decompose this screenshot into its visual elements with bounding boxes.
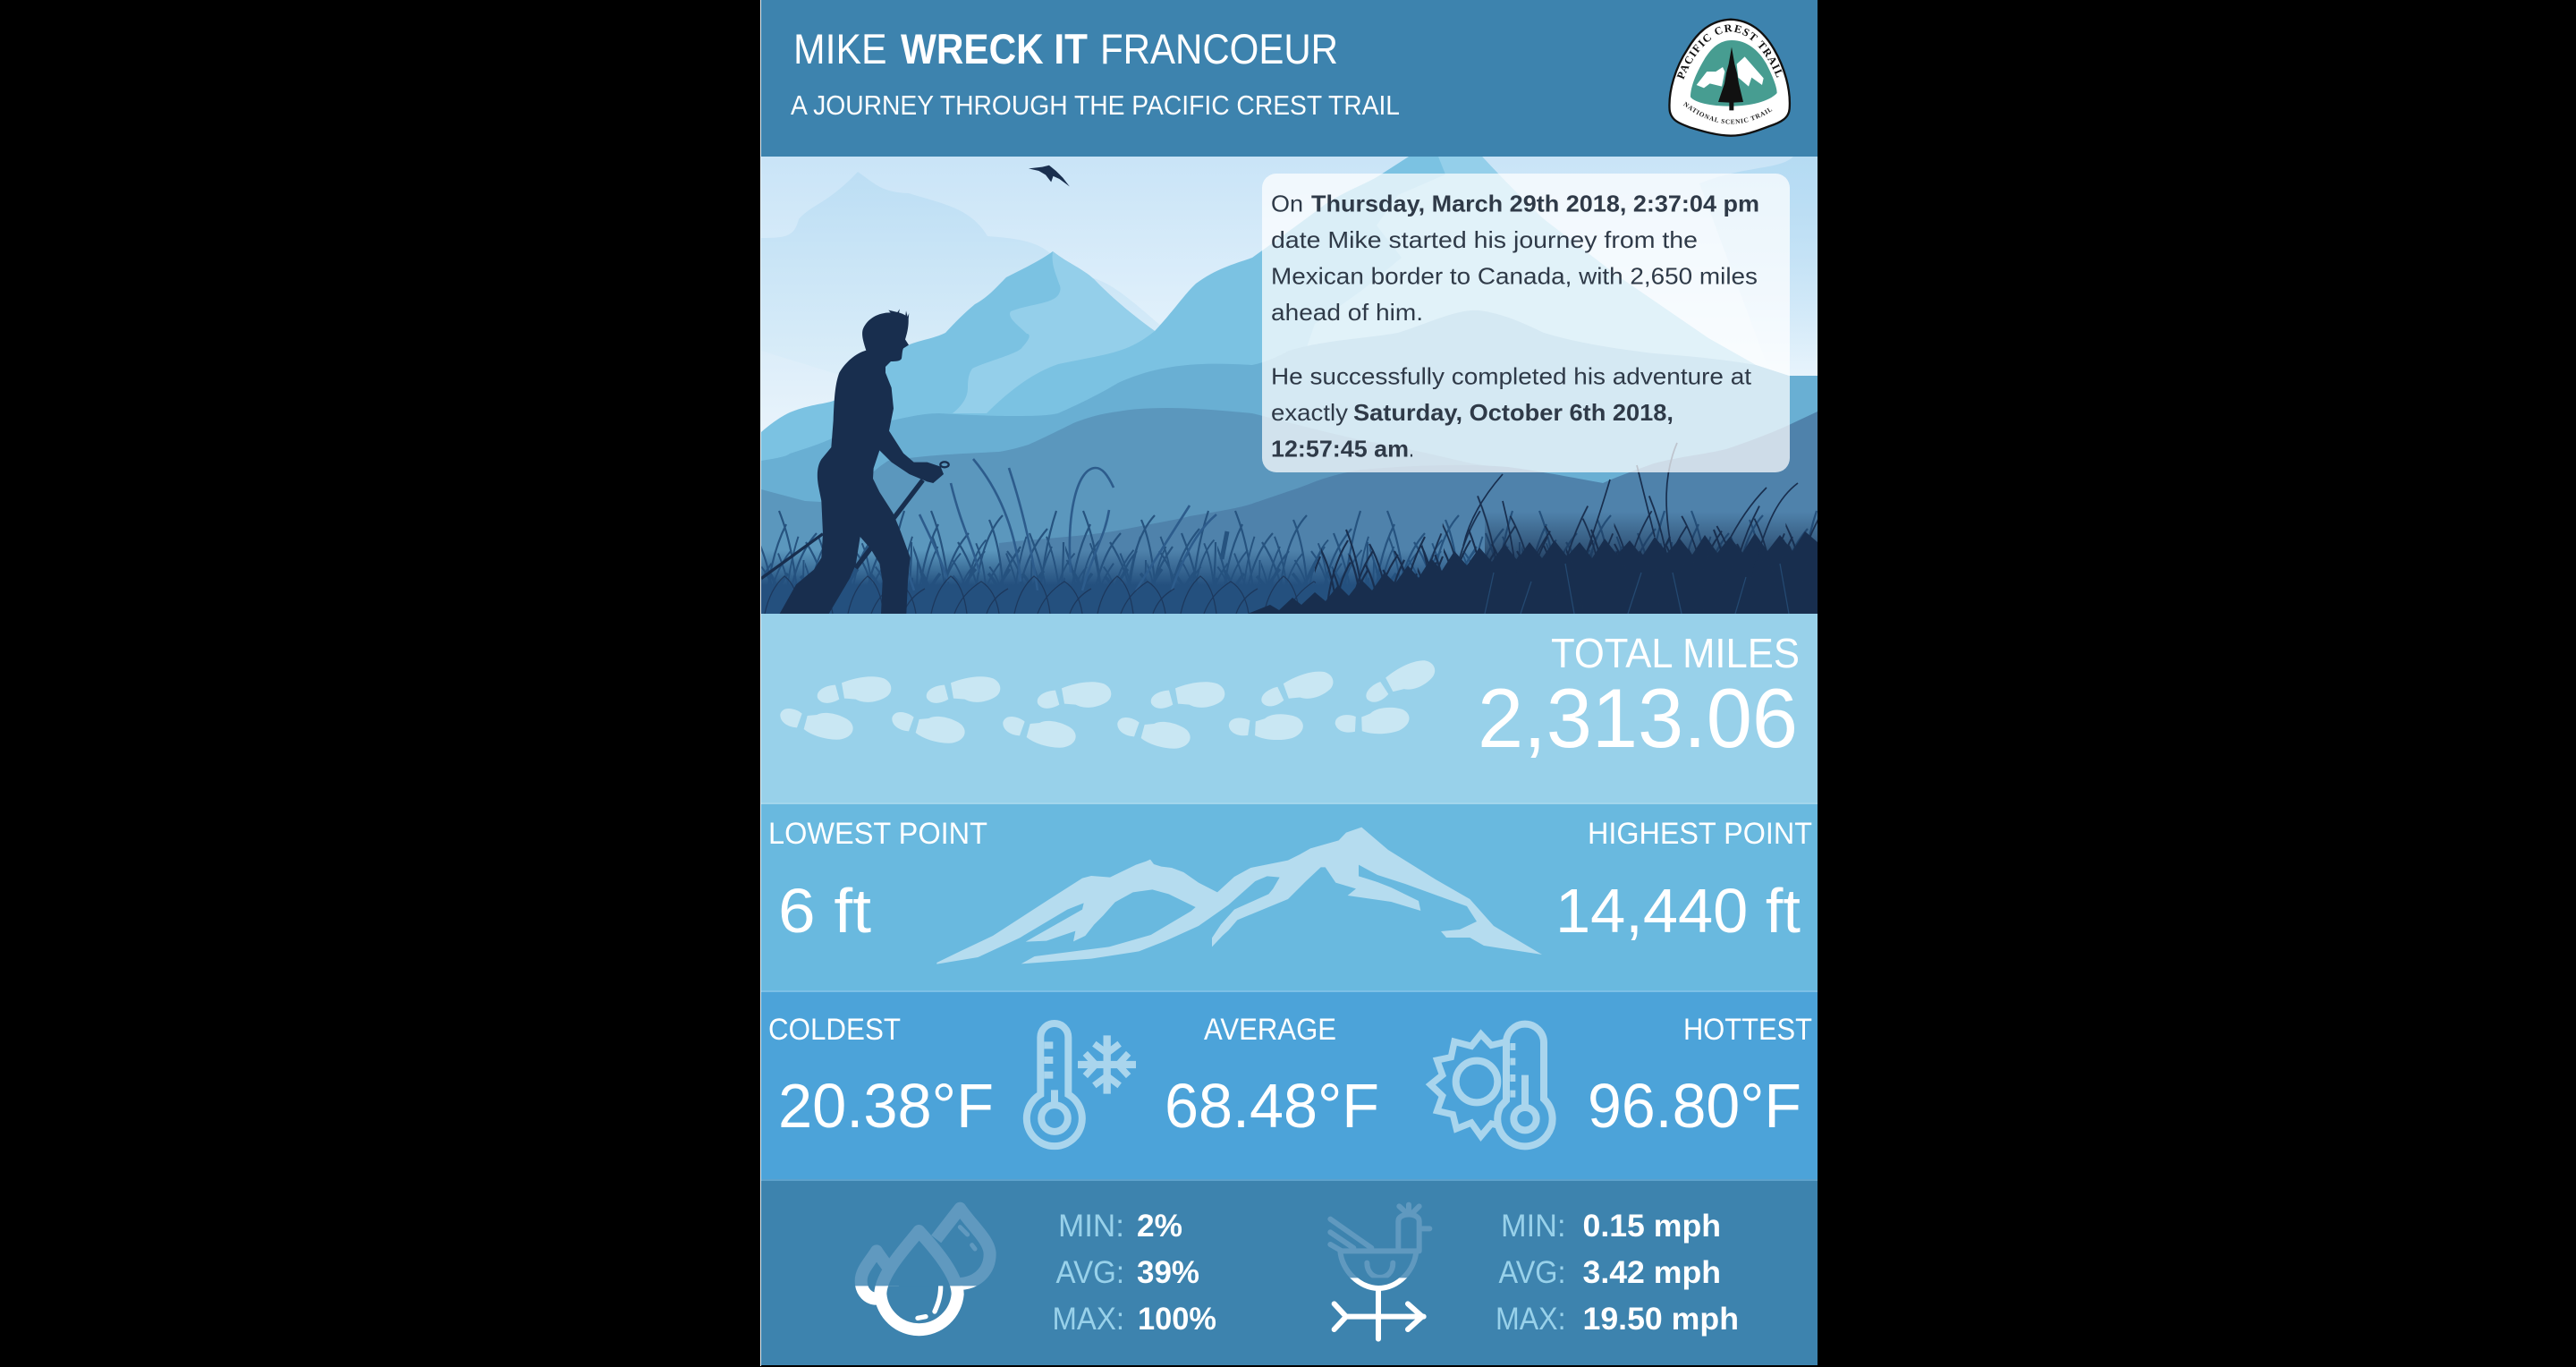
journey paragraph 2: .	[1409, 435, 1414, 462]
journey paragraph 1: On	[1271, 190, 1303, 217]
journey paragraph 2: 12:57:45 am	[1271, 435, 1409, 462]
callout: journey text	[1262, 174, 1790, 472]
average value: 68.48°F	[1165, 1071, 1379, 1141]
humidity labels: MIN:	[1058, 1209, 1124, 1244]
coldest label: COLDEST	[768, 1013, 901, 1047]
wind values	[1583, 1209, 1739, 1337]
humidity labels: MAX:	[1052, 1302, 1124, 1337]
panel: temperature	[761, 990, 1818, 1179]
journey paragraph 2: Saturday, October 6th 2018,	[1353, 399, 1674, 426]
coldest value: 20.38°F	[778, 1071, 994, 1141]
wind labels: MIN:	[1501, 1209, 1565, 1244]
wind values: 3.42 mph	[1583, 1255, 1721, 1290]
journey paragraph 2: He successfully completed his adventure at	[1271, 363, 1752, 390]
humidity labels	[1052, 1209, 1124, 1337]
icon: footprints	[780, 657, 1439, 751]
bird	[1029, 166, 1070, 186]
journey paragraph 2	[1271, 363, 1752, 462]
wind labels: AVG:	[1499, 1255, 1565, 1290]
hiker silhouette	[761, 309, 949, 614]
journey paragraph 1: date Mike started his journey from the	[1271, 226, 1698, 253]
hottest value: 96.80°F	[1588, 1071, 1801, 1141]
icon: cold thermometer with snowflake	[1027, 1023, 1136, 1146]
infographic	[760, 0, 1818, 1366]
wind values: 19.50 mph	[1583, 1302, 1739, 1337]
subtitle: A JOURNEY THROUGH THE PACIFIC CREST TRAIL	[791, 89, 1400, 121]
humidity values	[1137, 1209, 1216, 1337]
title: MIKE	[793, 25, 887, 72]
panel: header	[761, 0, 1818, 157]
wind labels: MAX:	[1496, 1302, 1565, 1337]
journey paragraph 1: Mexican border to Canada, with 2,650 miles	[1271, 263, 1758, 290]
highest point label: HIGHEST POINT	[1588, 817, 1812, 851]
panel: elevation	[761, 802, 1818, 990]
title: FRANCOEUR	[1100, 25, 1338, 72]
humidity values: 39%	[1137, 1255, 1199, 1290]
icon: mountain	[936, 828, 1542, 964]
wind labels	[1496, 1209, 1565, 1337]
grass: mid-blue layer	[761, 459, 1818, 614]
title: WRECK IT	[901, 25, 1088, 72]
lowest point label: LOWEST POINT	[768, 817, 987, 851]
icon: pacific crest trail badge	[1668, 18, 1791, 137]
total miles label: TOTAL MILES	[1551, 630, 1800, 676]
humidity values: 100%	[1138, 1302, 1216, 1337]
humidity labels: AVG:	[1055, 1255, 1124, 1290]
journey paragraph 1: ahead of him.	[1271, 299, 1423, 326]
panel: humidity and wind	[761, 1179, 1818, 1365]
title	[793, 25, 1338, 72]
humidity values: 2%	[1137, 1209, 1182, 1244]
total miles value: 2,313.06	[1478, 671, 1798, 765]
panel: hero illustration	[761, 157, 1818, 614]
hottest label: HOTTEST	[1683, 1013, 1812, 1047]
wind values: 0.15 mph	[1583, 1209, 1721, 1244]
icon: wind vane	[1330, 1205, 1429, 1339]
icon: pacific crest trail badge: PACIFIC CREST TRAIL	[1676, 25, 1783, 80]
grass: dark foreground layer	[761, 443, 1818, 614]
icon: pacific crest trail badge: NATIONAL SCENIC TRAIL	[1683, 102, 1773, 123]
panel: total miles	[761, 614, 1818, 802]
icon: humidity drops	[861, 1209, 990, 1329]
panel left edge	[760, 0, 761, 1366]
journey paragraph 1	[1271, 190, 1759, 326]
icon: hot thermometer with sun	[1430, 1024, 1553, 1146]
journey paragraph 1: Thursday, March 29th 2018, 2:37:04 pm	[1311, 190, 1759, 217]
average label: AVERAGE	[1204, 1013, 1336, 1047]
highest point value: 14,440 ft	[1555, 876, 1801, 946]
journey paragraph 2: exactly	[1271, 399, 1348, 426]
lowest point value: 6 ft	[778, 876, 871, 946]
